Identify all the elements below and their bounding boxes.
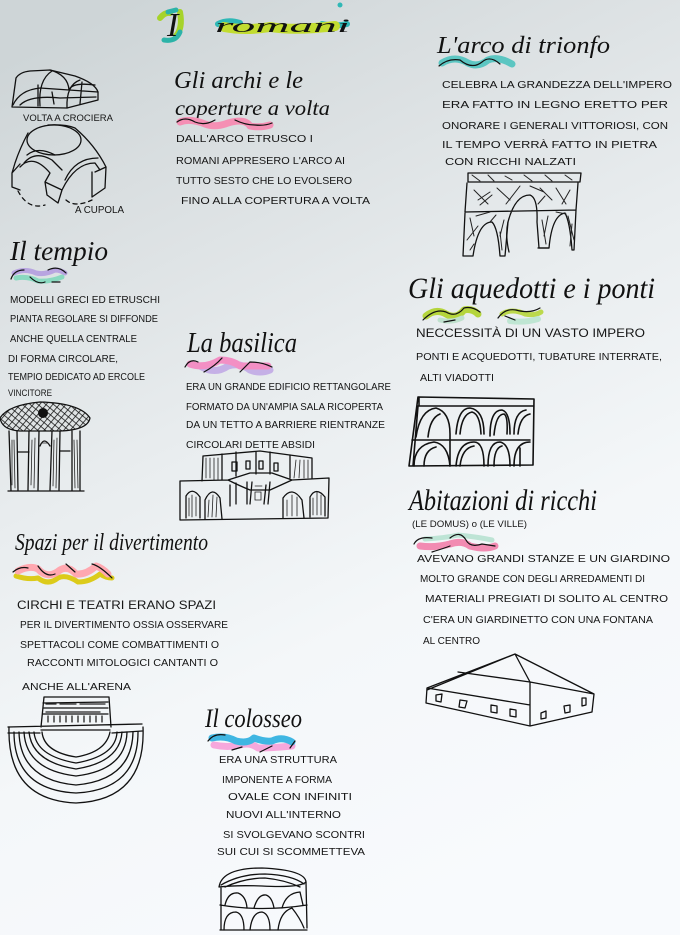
text block: ALTI VIADOTTI <box>420 372 494 384</box>
squiggle <box>13 564 112 582</box>
title <box>160 2 350 44</box>
text block: PER IL DIVERTIMENTO OSSIA OSSERVARE <box>20 619 228 631</box>
panel: spazi per il divertimento <box>8 530 228 803</box>
text block: DA UN TETTO A BARRIERE RIENTRANZE <box>186 419 385 431</box>
text block <box>8 294 160 398</box>
squiggle <box>11 268 66 283</box>
panel: l'arco di trionfo <box>436 33 672 256</box>
icon: triumphal arch <box>463 173 581 256</box>
text block <box>416 327 662 384</box>
text block: CON RICCHI NALZATI <box>445 156 576 168</box>
heading line 2: coperture a volta <box>175 96 330 120</box>
text block: TUTTO SESTO CHE LO EVOLSERO <box>176 175 352 187</box>
text block <box>442 79 672 168</box>
panel: il colosseo <box>204 704 365 930</box>
panel: il tempio <box>0 236 160 491</box>
text block: PONTI E ACQUEDOTTI, TUBATURE INTERRATE, <box>416 351 662 363</box>
heading: Gli aquedotti e i ponti <box>408 272 655 305</box>
text block <box>176 133 370 207</box>
text block: AVEVANO GRANDI STANZE E UN GIARDINO <box>417 553 670 565</box>
text block: C'ERA UN GIARDINETTO CON UNA FONTANA <box>423 614 653 626</box>
text block: NUOVI ALL'INTERNO <box>226 809 341 821</box>
text block: TEMPIO DEDICATO AD ERCOLE <box>8 371 145 383</box>
text block: ERA UNA STRUTTURA <box>219 754 337 766</box>
icon: round temple <box>0 402 90 491</box>
label: cupola: A CUPOLA <box>75 205 124 216</box>
panel: gli archi e le coperture a volta <box>174 68 370 207</box>
text block: AL CENTRO <box>423 635 480 647</box>
heading: L'arco di trionfo <box>436 33 610 59</box>
text block: ERA UN GRANDE EDIFICIO RETTANGOLARE <box>186 381 391 393</box>
text block: ANCHE QUELLA CENTRALE <box>10 333 137 345</box>
text block: CELEBRA LA GRANDEZZA DELL'IMPERO <box>442 79 672 91</box>
text block <box>17 600 228 693</box>
icon: volta a crociera <box>12 70 98 108</box>
text block <box>186 381 391 451</box>
text block: VINCITORE <box>8 388 52 398</box>
heading: Spazi per il divertimento <box>15 530 208 556</box>
text block: ANCHE ALL'ARENA <box>22 681 131 693</box>
label: volta a crociera: VOLTA A CROCIERA <box>23 113 113 123</box>
icon: basilica <box>180 451 329 520</box>
text block: CIRCOLARI DETTE ABSIDI <box>186 439 315 451</box>
heading: Abitazioni di ricchi <box>407 484 597 517</box>
text block: SUI CUI SI SCOMMETTEVA <box>217 846 365 858</box>
text block: PIANTA REGOLARE SI DIFFONDE <box>10 313 158 325</box>
title: I <box>166 7 180 44</box>
panel: abitazioni di ricchi <box>407 484 670 726</box>
heading: Il tempio <box>9 236 108 266</box>
squiggle <box>185 358 272 372</box>
text block: MOLTO GRANDE CON DEGLI ARREDAMENTI DI <box>420 573 645 585</box>
panel: gli aquedotti e i ponti <box>408 272 662 466</box>
text block: MATERIALI PREGIATI DI SOLITO AL CENTRO <box>425 593 668 605</box>
heading: Il colosseo <box>204 704 302 733</box>
text block: CIRCHI E TEATRI ERANO SPAZI <box>17 600 216 612</box>
icon: domus house <box>426 654 594 726</box>
icon: colosseum <box>219 868 307 930</box>
text block <box>417 553 670 647</box>
heading: La basilica <box>186 328 297 359</box>
text block: FINO ALLA COPERTURA A VOLTA <box>181 195 370 207</box>
text block <box>217 754 365 858</box>
text block: DALL'ARCO ETRUSCO I <box>176 133 313 145</box>
icon: aqueduct <box>409 397 534 466</box>
squiggle <box>414 534 495 552</box>
squiggle <box>208 735 295 752</box>
text block: IMPONENTE A FORMA <box>222 774 332 786</box>
text block: ROMANI APPRESERO L'ARCO AI <box>176 155 345 167</box>
text block: ERA FATTO IN LEGNO ERETTO PER <box>442 99 669 111</box>
text block: DI FORMA CIRCOLARE, <box>8 353 118 365</box>
panel: la basilica <box>180 328 391 520</box>
icon: cupola <box>12 125 106 206</box>
icon: theatre <box>8 697 143 803</box>
text block: NECCESSITÀ DI UN VASTO IMPERO <box>416 327 645 340</box>
title: romani <box>215 16 350 37</box>
text block: RACCONTI MITOLOGICI CANTANTI O <box>27 657 218 669</box>
panel: volte drawings <box>12 70 124 216</box>
text block: OVALE CON INFINITI <box>228 791 352 803</box>
squiggles <box>423 308 541 322</box>
heading: Gli archi e le <box>174 68 303 94</box>
text block: MODELLI GRECI ED ETRUSCHI <box>10 294 160 306</box>
text block: SI SVOLGEVANO SCONTRI <box>223 829 365 841</box>
squiggle <box>439 59 512 66</box>
text block: SPETTACOLI COME COMBATTIMENTI O <box>20 639 219 651</box>
squiggle <box>177 119 272 127</box>
text block: IL TEMPO VERRÀ FATTO IN PIETRA <box>442 138 657 151</box>
subheading: (LE DOMUS) o (LE VILLE) <box>412 519 527 529</box>
text block: FORMATO DA UN'AMPIA SALA RICOPERTA <box>186 401 383 413</box>
text block: ONORARE I GENERALI VITTORIOSI, CON <box>442 120 668 132</box>
